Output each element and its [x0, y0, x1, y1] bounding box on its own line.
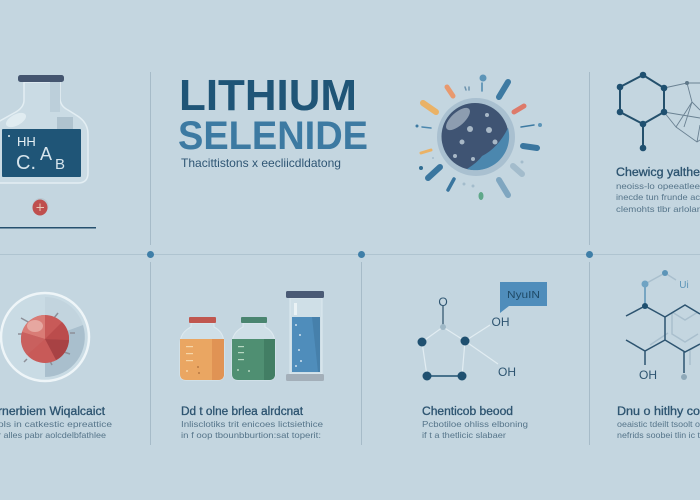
- text block: bottom centre-left: Dd t olne brlea alrdcnat: [181, 406, 304, 418]
- text block: bottom left: r alles pabr aolcdelbfathlee: [0, 430, 106, 440]
- diagram: fused ring molecule: [626, 270, 700, 382]
- text block: bottom right: Dnu o hitlhy co: [617, 406, 700, 418]
- diagram: ring molecule with OH groups: O: [438, 295, 448, 309]
- subtitle: Thacittistons x eecliicdldatong: [181, 156, 341, 170]
- callout: label tag: NyuIN: [507, 289, 540, 301]
- callout: label tag: [500, 282, 547, 313]
- icon: sphere with radiating rays: [416, 74, 542, 200]
- text block: bottom right: nefrids soobei tlin ic t: [617, 430, 700, 440]
- text block: bottom centre-left: Inlisclotiks trit enicoes lictsiethice: [181, 419, 323, 429]
- text block: top right: [616, 167, 700, 214]
- icon: red plus badge: [32, 198, 48, 216]
- diagram: fused ring molecule: OH: [639, 368, 657, 382]
- text block: bottom left: rnerbiem Wiqalcaict: [0, 406, 106, 418]
- text block: top right: neoiss-lo opeeatlee: [616, 181, 700, 191]
- text block: bottom centre-left: [181, 406, 323, 440]
- icon: green jar: [232, 317, 275, 380]
- text block: bottom left: [0, 406, 112, 440]
- icon: graduated cylinder: [286, 291, 324, 381]
- text block: top right: Chewicg yalthe: [616, 167, 700, 179]
- text block: bottom centre-right: Chenticob beood: [422, 406, 513, 418]
- grid node: centre: [358, 251, 365, 258]
- grid node: right: [586, 251, 593, 258]
- underline rule: [0, 227, 96, 228]
- title: [178, 71, 368, 158]
- text block: top right: clemohts tlbr arlolar: [616, 204, 700, 214]
- text block: bottom centre-right: if t a thetlicic slabaer: [422, 430, 506, 440]
- diagram: ring molecule with OH groups: OH: [492, 315, 510, 329]
- text block: top right: inecde tun frunde ac: [616, 192, 700, 202]
- icon: orange jar: [180, 317, 224, 380]
- icon: flask with formula label: A: [40, 144, 52, 164]
- icon: flask with formula label: B: [55, 156, 65, 173]
- icon: flask with formula label: HH: [17, 134, 36, 149]
- title: LITHIUM: [179, 71, 357, 120]
- diagram: fused ring molecule: Ui: [679, 280, 689, 291]
- title: SELENIDE: [178, 114, 368, 158]
- text block: bottom left: ols in catkestic epreattice: [0, 419, 112, 429]
- text block: bottom centre-left: in f oop tbounbburtion:sat toperit:: [181, 430, 321, 440]
- text block: bottom centre-right: [422, 406, 528, 440]
- grid node: left: [147, 251, 154, 258]
- icon: hexagon molecule: [617, 72, 700, 151]
- diagram: ring molecule with OH groups: [418, 295, 516, 380]
- diagram: ring molecule with OH groups: OH: [498, 365, 516, 379]
- text block: bottom right: [617, 406, 700, 440]
- text block: bottom centre-right: Pcbotiloe ohliss elboning: [422, 419, 528, 429]
- text block: bottom right: oeaistic tdeilt tsoolt o: [617, 419, 700, 429]
- icon: flask with formula label: C.: [16, 152, 36, 174]
- icon: flask with formula label: [0, 75, 88, 183]
- icon: red faceted sphere in circle: [1, 293, 89, 381]
